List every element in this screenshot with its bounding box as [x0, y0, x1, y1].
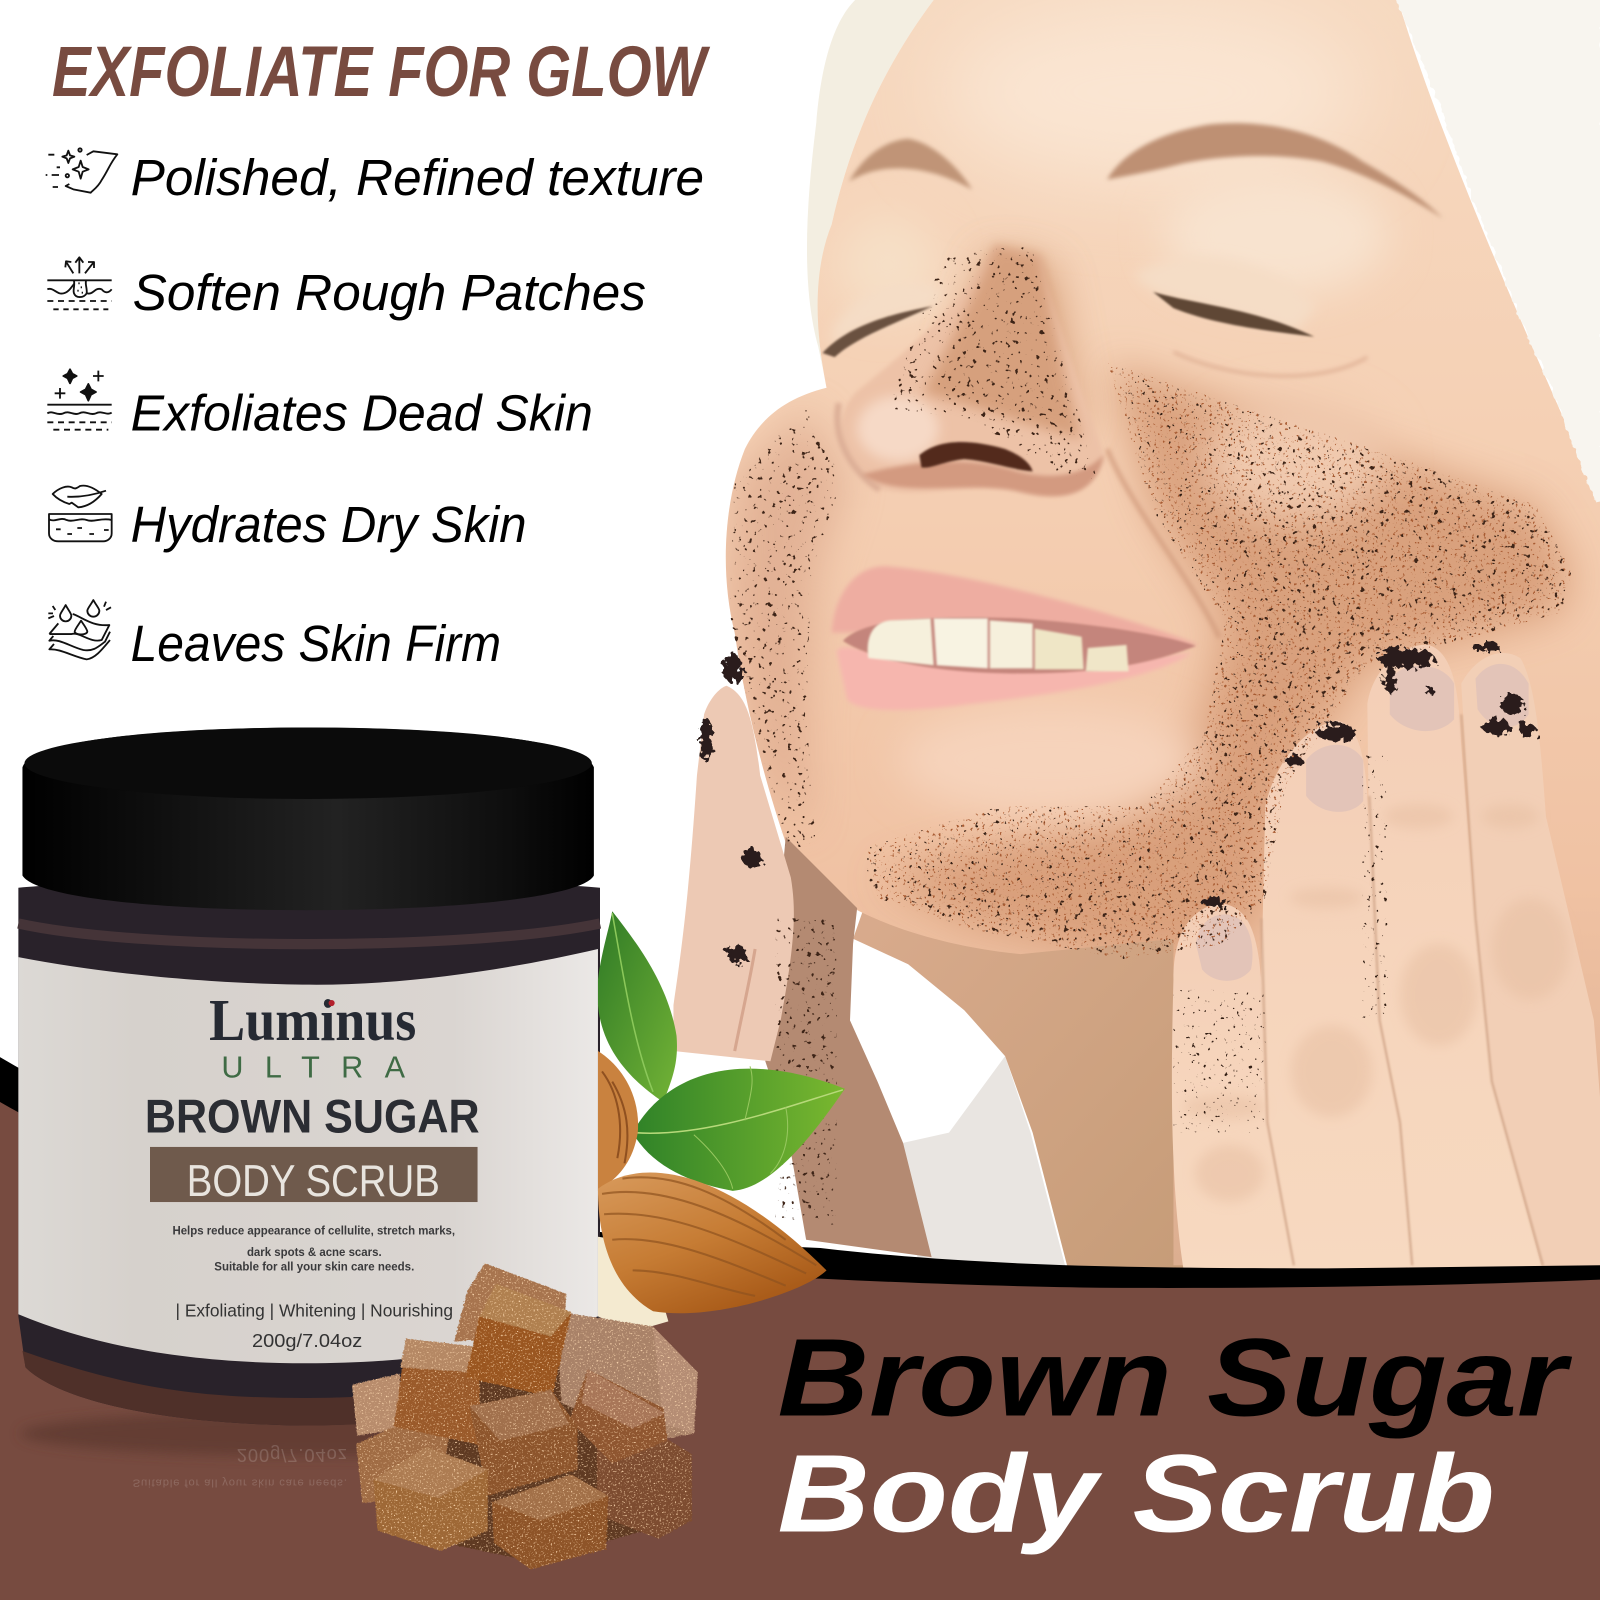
icon: drops on layered skin	[48, 600, 111, 659]
leaf: horizontal	[633, 1066, 845, 1191]
product jar	[18, 728, 612, 1489]
leaves and almonds	[598, 911, 845, 1332]
cube right lower	[597, 1437, 692, 1539]
text: Leaves Skin Firm	[131, 615, 501, 672]
jar reflection text	[133, 1445, 347, 1489]
text: Soften Rough Patches	[133, 264, 646, 321]
benefit: exfoliates	[47, 369, 593, 442]
cube right	[569, 1369, 667, 1463]
cube front left	[373, 1447, 488, 1551]
cube far left	[352, 1373, 400, 1436]
brown footer panel	[0, 1102, 1600, 1600]
headline	[778, 1316, 1572, 1556]
benefit: soften patches	[47, 257, 646, 321]
scrub specks	[730, 245, 1571, 1133]
cube back top	[454, 1263, 566, 1342]
net weight: 200g/7.04oz	[252, 1330, 362, 1351]
left towel	[807, 0, 934, 378]
cube centre	[469, 1390, 578, 1496]
heading: EXFOLIATE FOR GLOW	[52, 32, 711, 112]
icon: lips over skin	[49, 486, 112, 541]
label description: dark spots & acne scars.	[247, 1246, 382, 1259]
sub brand: ULTRA	[221, 1051, 406, 1085]
cube left lower	[356, 1420, 449, 1503]
curved black band	[0, 1057, 1600, 1301]
left hand behind jaw	[673, 686, 932, 1257]
body scrub bar: BODY SCRUB	[187, 1155, 440, 1206]
jar body	[18, 880, 600, 1426]
right towel	[1395, 0, 1600, 502]
jar lid	[22, 728, 594, 910]
label description: Helps reduce appearance of cellulite, stretch marks,	[172, 1225, 455, 1238]
cube top front	[465, 1284, 571, 1397]
jar shadow	[20, 1411, 612, 1456]
almond: upper	[598, 1051, 638, 1191]
almond: large	[598, 1173, 827, 1313]
red dot	[329, 1000, 335, 1006]
jar reflection text: Suitable for all your skin care needs.	[133, 1477, 347, 1489]
photo: woman with scrub on face	[673, 0, 1600, 1270]
text: Polished, Refined texture	[131, 149, 704, 206]
right hand fingers	[1172, 645, 1600, 1270]
cube front centre	[492, 1474, 608, 1569]
neck	[853, 898, 1184, 1270]
benefit: hydrates	[49, 486, 527, 553]
headline line 2: Body Scrub	[778, 1433, 1495, 1556]
cube left mid	[394, 1339, 480, 1445]
benefit: polished texture	[46, 148, 704, 206]
shirt collar	[903, 1056, 1066, 1270]
teeth	[868, 618, 1129, 671]
text: Hydrates Dry Skin	[131, 496, 527, 553]
jar reflection text: 200g/7.04oz	[237, 1445, 347, 1466]
brand name: Luminus	[209, 987, 416, 1053]
closed eyes	[822, 257, 1367, 376]
leaf: upright	[598, 911, 677, 1102]
scrub clumps on fingertips	[700, 643, 1536, 963]
cube pile shadow filler	[378, 1327, 684, 1561]
icon: sparkling sheet	[46, 148, 117, 193]
sugar cubes	[352, 1263, 698, 1569]
eyebrows	[849, 123, 1443, 218]
jar label	[18, 949, 598, 1363]
label description: Suitable for all your skin care needs.	[214, 1260, 414, 1273]
benefit: firm	[48, 600, 501, 672]
almond: shelled nut	[598, 1237, 668, 1332]
icon: sparkles over skin layers	[47, 369, 112, 430]
headline line 1: Brown Sugar	[778, 1316, 1572, 1439]
text: Exfoliates Dead Skin	[131, 385, 593, 442]
label claims: | Exfoliating | Whitening | Nourishing	[176, 1300, 453, 1320]
nose	[837, 245, 1104, 496]
lips	[832, 566, 1199, 710]
cube back right	[556, 1311, 698, 1441]
face skin	[726, 0, 1600, 1265]
label description	[172, 1225, 455, 1273]
icon: skin pore	[47, 257, 112, 309]
jar bottom scrub	[22, 1347, 602, 1426]
product name: BROWN SUGAR	[145, 1091, 480, 1143]
